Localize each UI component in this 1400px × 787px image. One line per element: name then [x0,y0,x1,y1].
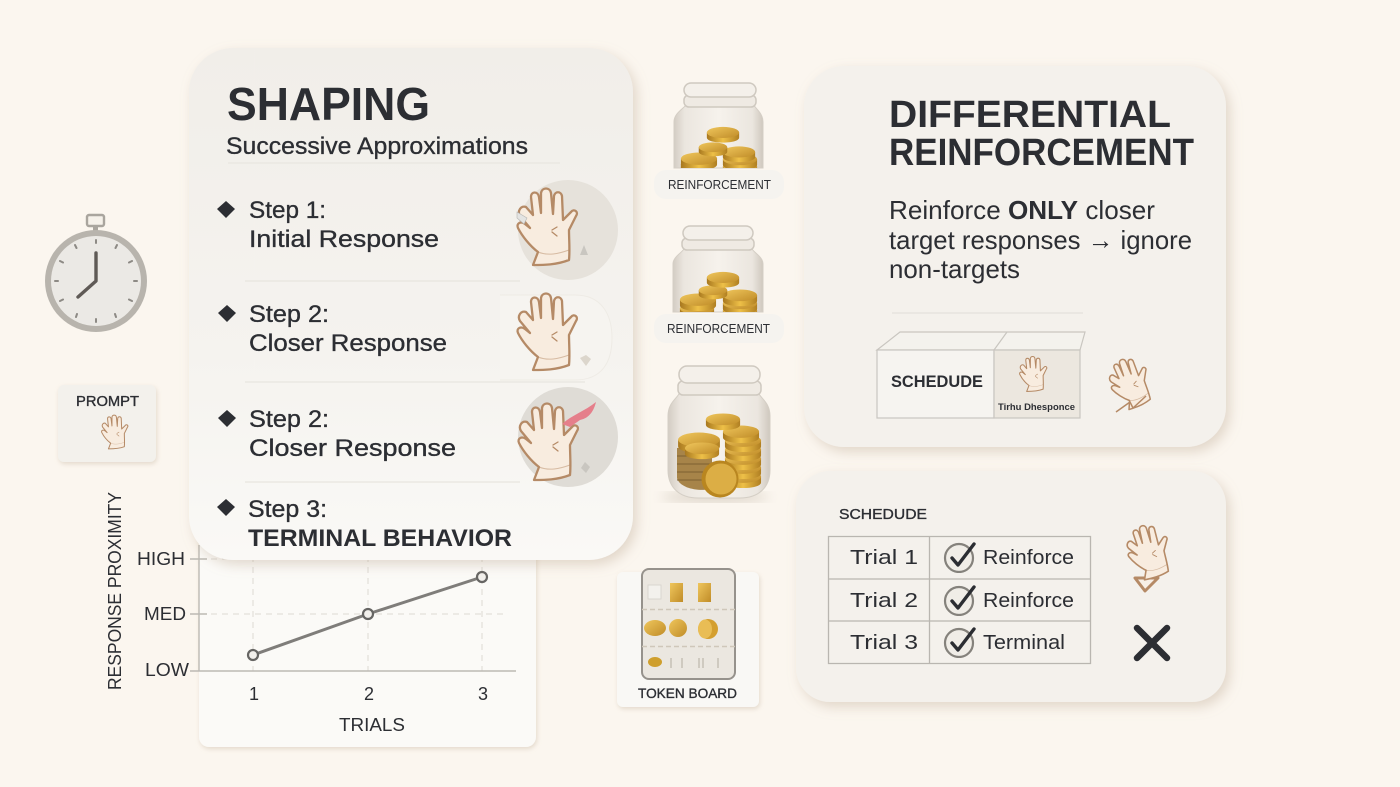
schedule box: SCHEDUDE [891,373,983,391]
axis labels: HIGH [137,549,185,569]
step 1 [217,180,618,280]
step 2 repeat: Step 2: [249,406,329,433]
axis labels: 3 [478,684,488,704]
table [828,536,1090,664]
jar body with coins [674,83,763,177]
table: Trial 2 [850,590,918,612]
subheading: Successive Approximations [226,133,528,160]
table: Trial 3 [850,632,918,654]
step 2 [218,294,612,380]
icon: cross [1137,628,1167,658]
jar body with coins [673,226,763,321]
axis labels: MED [144,604,186,624]
heading [889,94,1194,174]
schedule box: Tirhu Dhesponce [998,402,1075,413]
schedule heading: SCHEDUDE [839,506,927,523]
heading: shaping: SHAPING [227,78,430,130]
icon: stopwatch [45,215,147,332]
table: Terminal [983,632,1065,654]
board [642,569,735,679]
step 2 repeat [218,387,618,487]
panel: schedule table [796,471,1226,702]
table: Reinforce [983,590,1074,612]
panel: line chart [105,492,536,747]
axis labels: RESPONSE PROXIMITY [105,492,125,690]
heading: DIFFERENTIAL [889,94,1171,136]
icon: hand [1104,353,1156,413]
step 3: TERMINAL BEHAVIOR [248,525,512,552]
description: Reinforce ONLY closer [889,195,1155,225]
data line [248,572,487,660]
description [889,195,1192,284]
icon: hand with triangle [1123,521,1174,591]
panel: shaping [189,48,633,560]
description: non-targets [889,254,1020,284]
step 2: Closer Response [249,330,447,357]
step 2 repeat: Closer Response [249,435,456,462]
jar: reinforcement one [668,82,771,189]
axis labels: 2 [364,684,374,704]
card: token board [617,569,759,707]
label: REINFORCEMENT [668,178,771,192]
table: Reinforce [983,547,1074,569]
step 2: Step 2: [249,301,329,328]
step 1: Step 1: [249,197,326,224]
step 3: Step 3: [248,496,327,523]
label: TOKEN BOARD [638,685,737,701]
step 3 [217,496,512,552]
label: REINFORCEMENT [667,322,770,336]
axis labels: 1 [249,684,259,704]
axis labels [105,492,488,735]
description: target responses → ignore [889,225,1192,255]
jar: reinforcement two [668,225,770,333]
card: prompt [58,385,156,462]
schedule box [877,332,1085,418]
jar: full coins [661,366,770,502]
card: prompt: PROMPT [76,394,139,410]
heading: REINFORCEMENT [889,132,1194,174]
axis labels: TRIALS [339,715,405,735]
panel: differential reinforcement [804,66,1226,447]
axis labels: LOW [145,660,189,680]
step 1: Initial Response [249,226,439,253]
table: Trial 1 [850,547,918,569]
